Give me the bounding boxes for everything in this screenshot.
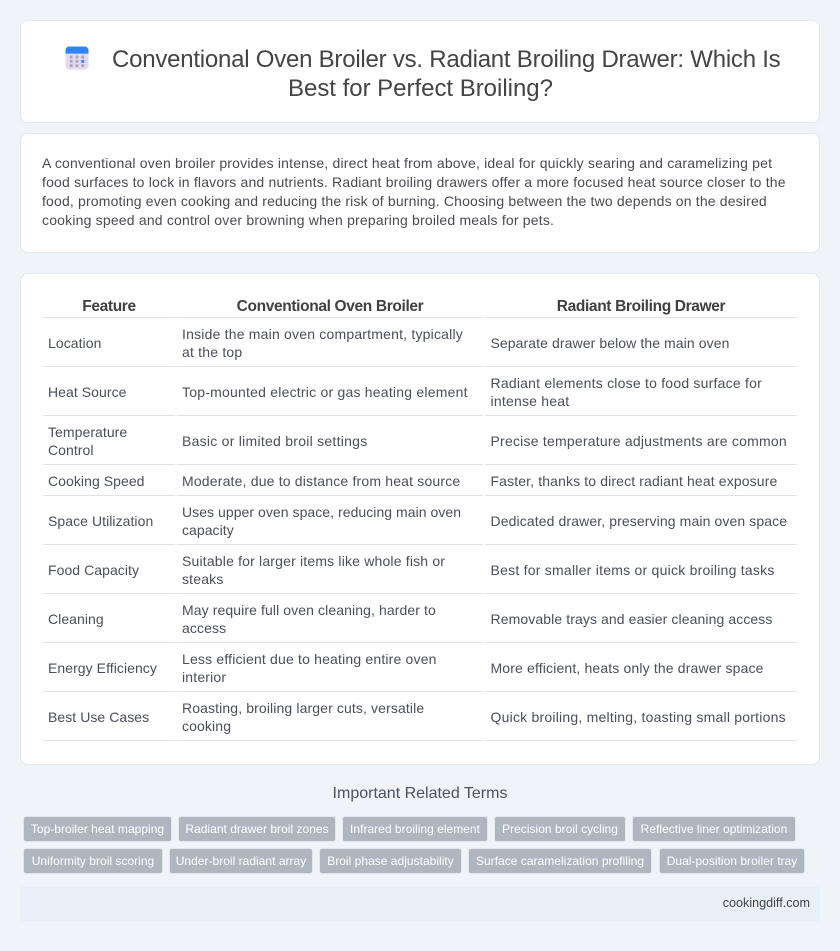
tags: related terms: Reflective liner optimization [641, 822, 787, 836]
row: Location: Location [48, 335, 101, 351]
row: Best Use Cases: Best Use Cases [48, 709, 149, 725]
tags: related terms: Surface caramelization profiling [476, 854, 644, 868]
table header: Radiant Broiling Drawer [557, 298, 725, 315]
row: Best Use Cases: cooking [182, 718, 231, 734]
intro text: A conventional oven broiler provides intense, direct heat from above, ideal for quickly searing and caramelizing pet [42, 155, 772, 171]
row: Space Utilization: capacity [182, 522, 234, 538]
row: Food Capacity [48, 553, 775, 587]
row: Temperature Control: Precise temperature adjustments are common [490, 433, 787, 449]
row: Cleaning: May require full oven cleaning, harder to [182, 602, 436, 618]
row: Temperature Control: Temperature [48, 424, 127, 440]
table header: Conventional Oven Broiler [237, 298, 423, 315]
row: Space Utilization: Uses upper oven space, reducing main oven [182, 504, 461, 520]
panel: comparison table [20, 273, 820, 765]
title: Best for Perfect Broiling? [288, 75, 553, 102]
row: Space Utilization: Space Utilization [48, 513, 153, 529]
row: Cooking Speed: Cooking Speed [48, 473, 145, 489]
footer bar [20, 887, 820, 921]
row: Location: at the top [182, 344, 242, 360]
tags: related terms: Broil phase adjustability [327, 854, 454, 868]
row: Location [48, 326, 729, 360]
row: Best Use Cases: Quick broiling, melting, toasting small portions [490, 709, 786, 725]
row: Cleaning [48, 602, 773, 636]
row: Best Use Cases: Roasting, broiling larger cuts, versatile [182, 700, 424, 716]
row: Energy Efficiency: Energy Efficiency [48, 660, 157, 676]
row: Cooking Speed [48, 473, 777, 489]
row: Cooking Speed: Faster, thanks to direct radiant heat exposure [490, 473, 777, 489]
table header: Feature [82, 298, 136, 315]
icon: calendar [65, 46, 89, 70]
row: Energy Efficiency: More efficient, heats only the drawer space [490, 660, 764, 676]
row: Energy Efficiency: interior [182, 669, 226, 685]
row: Heat Source: intense heat [490, 393, 569, 409]
row: Heat Source: Radiant elements close to food surface for [490, 375, 762, 391]
row: Cleaning: Removable trays and easier cleaning access [490, 611, 773, 627]
row: Location: Separate drawer below the main oven [490, 335, 729, 351]
row: Energy Efficiency [48, 651, 764, 685]
row: Cooking Speed: Moderate, due to distance from heat source [182, 473, 460, 489]
tags: related terms: Precision broil cycling [502, 822, 618, 836]
row: Food Capacity: Food Capacity [48, 562, 139, 578]
intro text [42, 155, 786, 228]
table header [82, 298, 726, 315]
row: Cleaning: access [182, 620, 226, 636]
row: Location: Inside the main oven compartment, typically [182, 326, 463, 342]
row: Space Utilization: Dedicated drawer, preserving main oven space [490, 513, 787, 529]
intro text: food, promoting even cooking and reducing the risk of burning. Choosing between the two depends on the desired [42, 193, 767, 209]
row: Temperature Control: Control [48, 442, 94, 458]
tags: related terms: Dual-position broiler tray [667, 854, 797, 868]
row: Temperature Control [48, 424, 787, 458]
footer text: cookingdiff.com [723, 896, 810, 910]
row: Heat Source [48, 375, 762, 409]
row: Food Capacity: Suitable for larger items like whole fish or [182, 553, 445, 569]
row: Heat Source: Top-mounted electric or gas heating element [182, 384, 468, 400]
row: Cleaning: Cleaning [48, 611, 104, 627]
tags: related terms [23, 816, 805, 874]
panel: intro paragraph [20, 133, 820, 253]
row: Food Capacity: Best for smaller items or quick broiling tasks [490, 562, 775, 578]
intro text: food surfaces to lock in flavors and nutrients. Radiant broiling drawers offer a more focused heat source closer to the [42, 174, 786, 190]
tags: related terms: Top-broiler heat mapping [31, 822, 164, 836]
row: Best Use Cases [48, 700, 786, 734]
panel: header [20, 20, 820, 123]
heading: related terms: Important Related Terms [333, 785, 507, 802]
row: Temperature Control: Basic or limited broil settings [182, 433, 367, 449]
row: Food Capacity: steaks [182, 571, 224, 587]
title: Conventional Oven Broiler vs. Radiant Broiling Drawer: Which Is [112, 46, 780, 73]
tags: related terms: Radiant drawer broil zones [185, 822, 329, 836]
tags: related terms: Infrared broiling element [350, 822, 480, 836]
title [112, 46, 780, 102]
intro text: cooking speed and control over browning when preparing broiled meals for pets. [42, 212, 554, 228]
row: Energy Efficiency: Less efficient due to heating entire oven [182, 651, 437, 667]
row: Space Utilization [48, 504, 787, 538]
row: Heat Source: Heat Source [48, 384, 126, 400]
tags: related terms: Uniformity broil scoring [32, 854, 154, 868]
tags: related terms: Under-broil radiant array [176, 854, 306, 868]
